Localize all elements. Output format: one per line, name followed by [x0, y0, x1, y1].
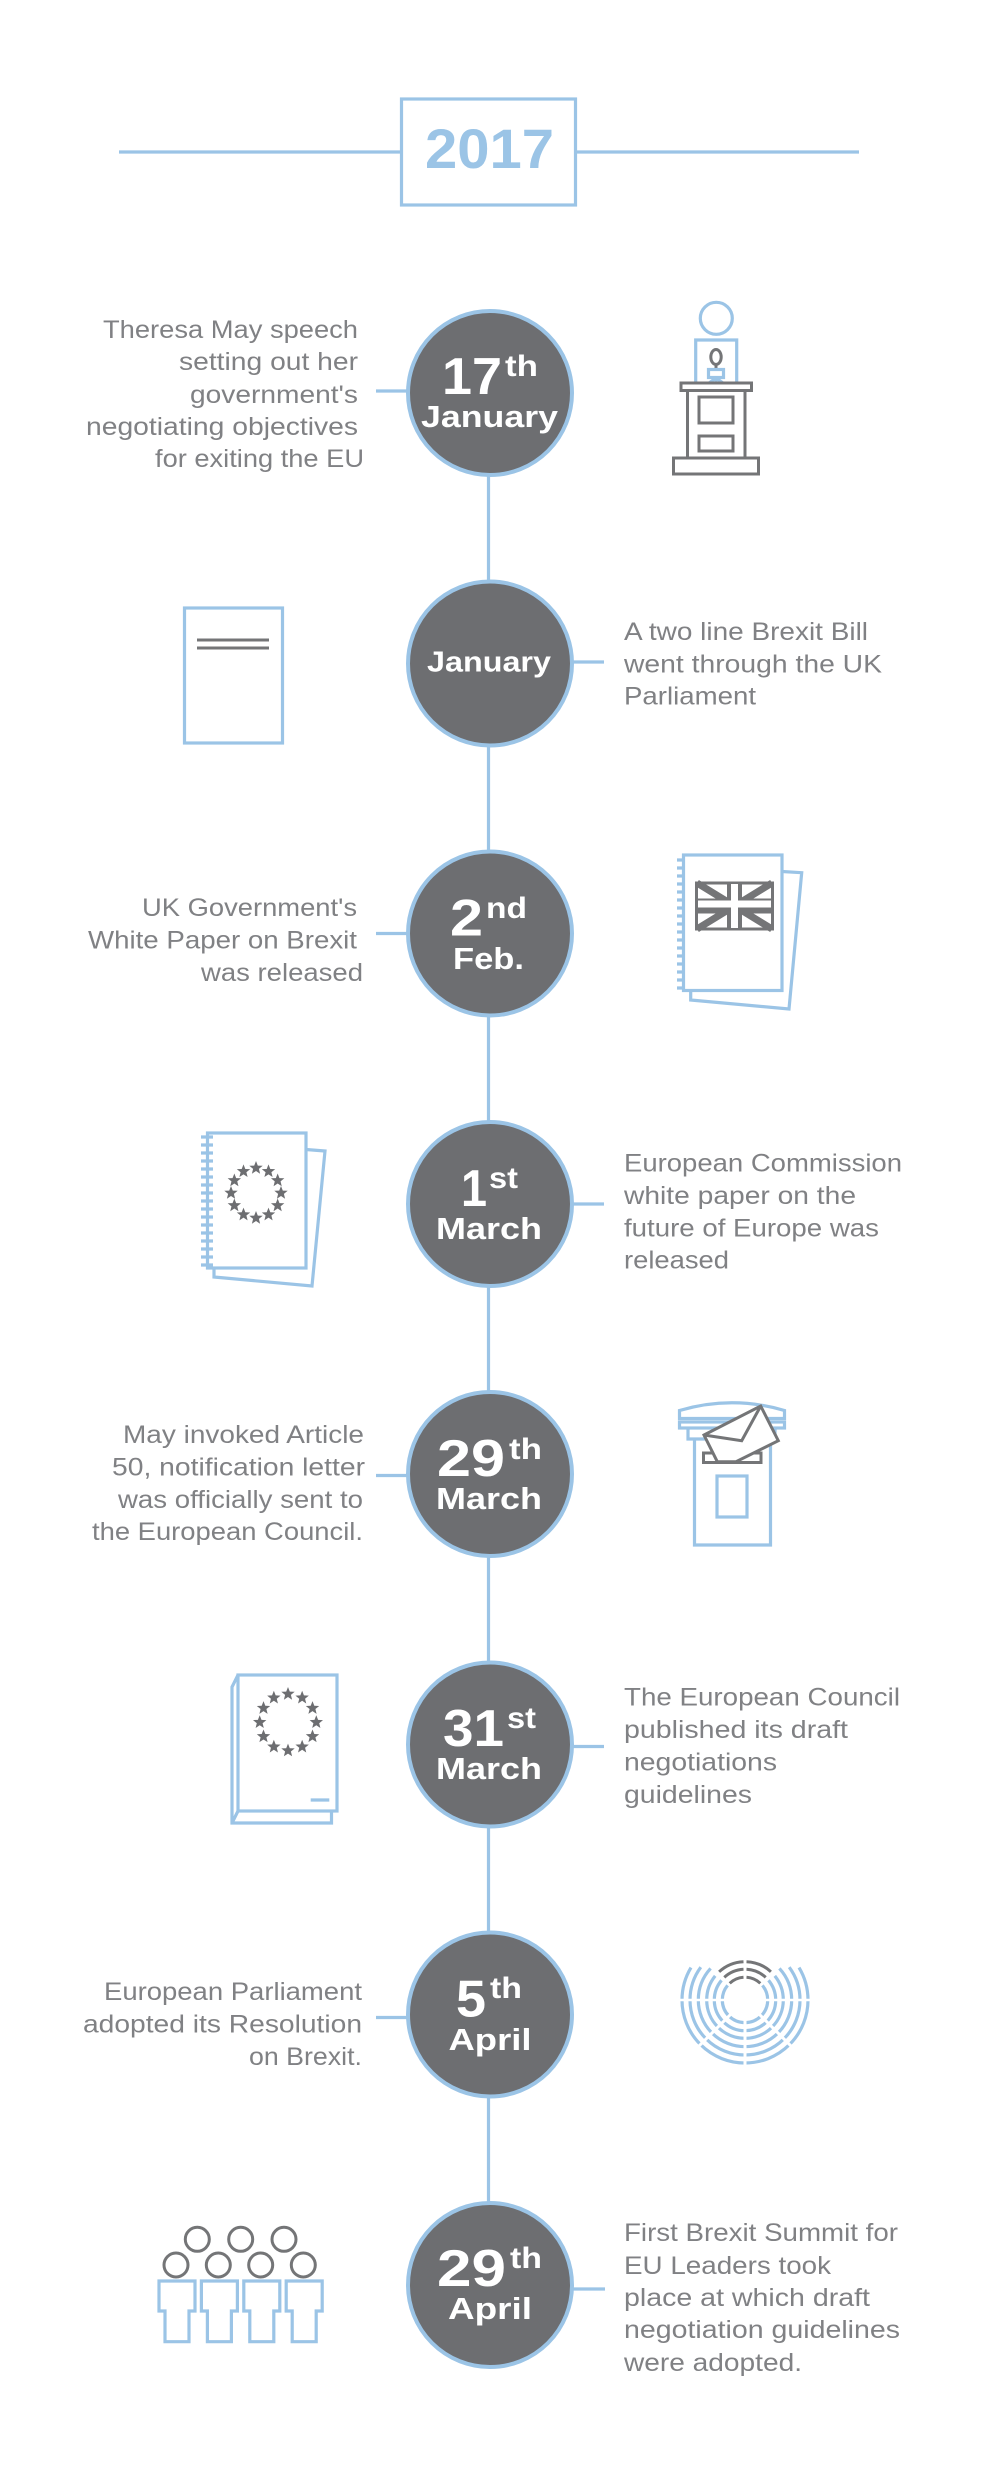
date badge: March: [436, 1751, 542, 1786]
icon: bill document: [184, 608, 282, 743]
description text: May invoked Article: [123, 1421, 364, 1449]
date badge: th: [490, 1972, 522, 2005]
description text: [88, 894, 363, 987]
description text: was released: [200, 959, 363, 987]
date badge: 2: [450, 890, 483, 948]
description text: European Commission: [624, 1150, 902, 1178]
description text: negotiations: [624, 1748, 777, 1776]
description text: A two line Brexit Bill: [624, 618, 868, 646]
description text: [623, 618, 882, 710]
description text: future of Europe was: [624, 1214, 879, 1242]
date badge: 29: [437, 1430, 505, 1488]
title: year: 2017: [425, 117, 554, 180]
icon: EU white paper: [201, 1133, 325, 1286]
year header: [119, 99, 859, 205]
icon: parliament hemicycle: [678, 1962, 812, 2070]
description text: UK Government's: [142, 894, 357, 922]
date badge: th: [510, 2242, 542, 2275]
description text: [623, 2219, 900, 2377]
description text: published its draft: [624, 1716, 848, 1744]
description text: for exiting the EU: [155, 445, 364, 473]
icon: post box with envelope: [680, 1403, 784, 1545]
date badge: [408, 1122, 572, 1286]
description text: European Parliament: [104, 1978, 362, 2006]
date badge: st: [507, 1702, 536, 1735]
date badge: th: [509, 1433, 542, 1466]
description text: negotiating objectives: [86, 413, 358, 441]
date badge: [408, 582, 572, 746]
description text: The European Council: [624, 1684, 900, 1712]
event: 29th April: [159, 2203, 900, 2377]
description text: Theresa May speech: [103, 316, 358, 344]
date badge: January: [427, 646, 551, 678]
event: 31st March: [232, 1662, 900, 1826]
description text: White Paper on Brexit: [88, 926, 357, 954]
description text: on Brexit.: [249, 2043, 362, 2071]
date badge: Feb.: [453, 941, 524, 976]
event: 17th January: [86, 302, 758, 475]
date badge: 5: [456, 1970, 486, 2028]
date badge: April: [448, 2291, 532, 2326]
description text: adopted its Resolution: [83, 2010, 362, 2038]
description text: the European Council.: [92, 1518, 363, 1546]
event: 1st March: [201, 1122, 902, 1286]
description text: guidelines: [624, 1781, 752, 1809]
description text: negotiation guidelines: [624, 2316, 900, 2344]
event: 5th April: [83, 1932, 812, 2096]
date badge: April: [448, 2022, 532, 2057]
icon: guidelines book: [232, 1675, 337, 1823]
date badge: 1: [461, 1160, 487, 1218]
date badge: [408, 2203, 572, 2367]
date badge: st: [489, 1162, 518, 1195]
description text: [83, 1978, 362, 2071]
description text: setting out her: [179, 348, 358, 376]
description text: [624, 1684, 900, 1809]
description text: 50, notification letter: [112, 1454, 365, 1482]
description text: was officially sent to: [117, 1486, 363, 1514]
event: 2nd February: [88, 852, 802, 1016]
date badge: [408, 1392, 572, 1556]
description text: [623, 1150, 902, 1274]
description text: Parliament: [624, 682, 756, 710]
description text: [86, 316, 364, 473]
date badge: [408, 1932, 572, 2096]
date badge: th: [505, 350, 538, 383]
date badge: [408, 852, 572, 1016]
description text: place at which draft: [624, 2284, 870, 2312]
date badge: 17: [442, 348, 502, 406]
event: 29th March: [92, 1392, 784, 1556]
icon: union flag: [696, 883, 772, 929]
date badge: January: [421, 399, 559, 434]
description text: went through the UK: [623, 650, 882, 678]
icon: EU leaders group: [159, 2227, 322, 2342]
timeline spine: [487, 470, 490, 2205]
description text: EU Leaders took: [624, 2252, 832, 2280]
description text: First Brexit Summit for: [624, 2219, 898, 2247]
description text: were adopted.: [623, 2349, 802, 2377]
icon: speaker at podium: [674, 302, 758, 474]
icon: UK white paper: [677, 855, 802, 1009]
icon: ring of stars: [253, 1687, 323, 1756]
description text: white paper on the: [623, 1182, 856, 1210]
description text: [92, 1421, 365, 1546]
icon: ring of stars: [224, 1161, 288, 1224]
description text: government's: [190, 381, 358, 409]
date badge: nd: [486, 892, 527, 925]
description text: released: [624, 1246, 729, 1274]
event: January: [184, 582, 882, 746]
date badge: March: [436, 1481, 542, 1516]
date badge: 29: [437, 2240, 506, 2298]
date badge: 31: [443, 1700, 504, 1758]
date badge: March: [436, 1211, 542, 1246]
date badge: [408, 311, 572, 475]
date badge: [408, 1662, 572, 1826]
